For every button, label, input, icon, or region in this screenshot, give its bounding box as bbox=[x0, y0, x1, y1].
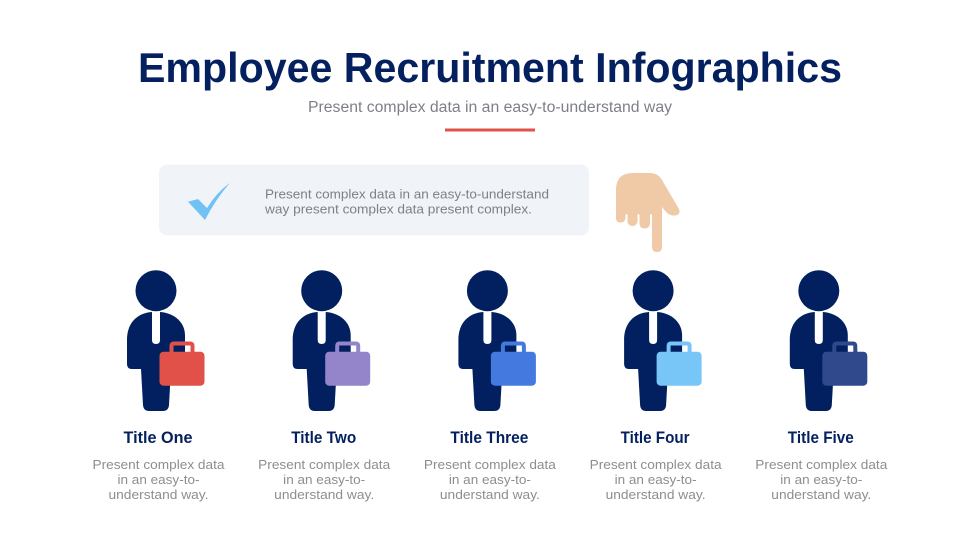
briefcase: blue bbox=[491, 342, 536, 386]
description three: in an easy-to- bbox=[449, 472, 531, 487]
person 1 bbox=[92, 270, 225, 502]
title: Employee Recruitment Infographics bbox=[138, 44, 842, 91]
description five: in an easy-to- bbox=[780, 472, 862, 487]
subtitle: Present complex data in an easy-to-understand way bbox=[308, 99, 672, 116]
callout text: Present complex data in an easy-to-understand bbox=[265, 186, 549, 202]
description three: understand way. bbox=[440, 487, 540, 502]
briefcase: light blue bbox=[657, 342, 702, 386]
title five: Title Five bbox=[788, 429, 854, 447]
description one: Present complex data bbox=[92, 457, 225, 472]
description two: Present complex data bbox=[258, 457, 391, 472]
description five bbox=[755, 457, 888, 502]
description four: in an easy-to- bbox=[615, 472, 697, 487]
icon: check mark bbox=[188, 183, 230, 220]
description four bbox=[590, 457, 722, 502]
person 3 bbox=[424, 270, 557, 502]
icon: pointing hand bbox=[616, 173, 680, 252]
description two bbox=[258, 457, 391, 502]
description four: understand way. bbox=[606, 487, 706, 502]
title three: Title Three bbox=[450, 429, 528, 447]
title four: Title Four bbox=[621, 429, 690, 447]
callout text: way present complex data present complex. bbox=[264, 202, 532, 216]
description three: Present complex data bbox=[424, 457, 557, 472]
panel: callout bbox=[159, 164, 589, 236]
person 4 bbox=[590, 270, 722, 502]
description five: Present complex data bbox=[755, 457, 888, 472]
briefcase: red bbox=[160, 342, 204, 386]
person 5 bbox=[755, 270, 888, 502]
description one: in an easy-to- bbox=[118, 472, 200, 487]
description one bbox=[92, 457, 225, 502]
title two: Title Two bbox=[291, 429, 356, 447]
description four: Present complex data bbox=[590, 457, 722, 472]
person 2 bbox=[258, 270, 391, 502]
title one: Title One bbox=[124, 429, 192, 447]
briefcase: navy bbox=[822, 342, 867, 386]
description three bbox=[424, 457, 557, 502]
briefcase: purple bbox=[325, 342, 370, 386]
description five: understand way. bbox=[771, 487, 871, 502]
description two: understand way. bbox=[274, 487, 374, 502]
title underline bbox=[445, 128, 535, 132]
callout text bbox=[264, 186, 549, 216]
description one: understand way. bbox=[108, 487, 208, 502]
description two: in an easy-to- bbox=[283, 472, 365, 487]
